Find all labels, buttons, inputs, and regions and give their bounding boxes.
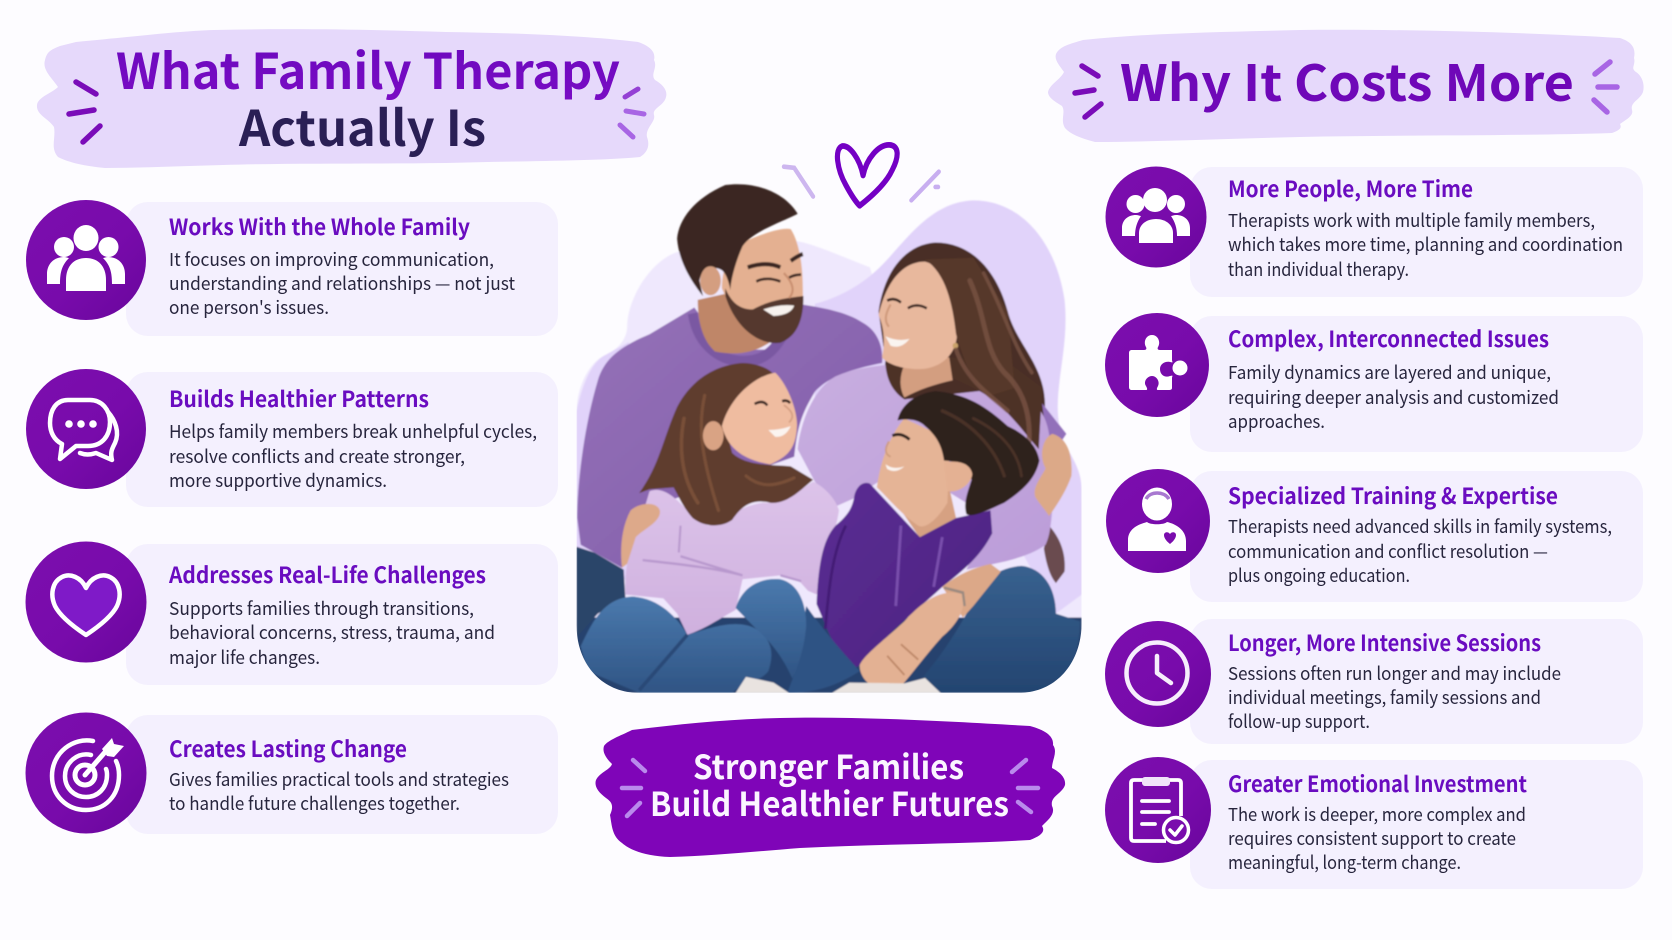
item text: more supportive dynamics. — [169, 467, 387, 493]
panel: right item 5 — [1105, 757, 1643, 889]
icon: target with arrow — [52, 738, 124, 810]
panel: left item 1 — [26, 200, 558, 336]
panel: right item 4 — [1105, 619, 1643, 744]
item text: requiring deeper analysis and customized — [1228, 384, 1559, 410]
item text: which takes more time, planning and coordination — [1228, 231, 1623, 257]
accent stroke left — [784, 167, 813, 197]
item title: Greater Emotional Investment — [1228, 767, 1527, 799]
item text — [169, 766, 509, 816]
item text: It focuses on improving communication, — [169, 246, 494, 272]
item text: follow-up support. — [1228, 708, 1370, 734]
item text — [1228, 513, 1612, 588]
item text: communication and conflict resolution — — [1228, 538, 1548, 564]
banner line one: Stronger Families — [693, 741, 964, 789]
right spark marks — [1594, 62, 1617, 112]
icon: heart outline — [837, 145, 897, 206]
card — [1190, 471, 1643, 602]
woman face — [879, 258, 1015, 396]
girl sweater — [625, 482, 839, 635]
item title: Addresses Real-Life Challenges — [168, 558, 486, 590]
shoes — [736, 677, 941, 693]
woman neck — [901, 357, 953, 397]
icon circle — [26, 542, 146, 662]
icon circle — [1106, 469, 1210, 573]
left spark marks — [69, 82, 100, 142]
item text: requires consistent support to create — [1228, 825, 1516, 851]
boy ear — [944, 462, 972, 491]
item title: Longer, More Intensive Sessions — [1228, 626, 1541, 658]
jeans — [581, 566, 1080, 693]
item text: Gives families practical tools and strategies — [169, 766, 509, 792]
card — [126, 372, 558, 507]
item title: Works With the Whole Family — [169, 210, 470, 242]
item text: behavioral concerns, stress, trauma, and — [169, 619, 495, 645]
icon circle — [1105, 757, 1211, 863]
banner line two: Build Healthier Futures — [650, 778, 1009, 826]
man ear — [700, 266, 721, 295]
item text: Therapists work with multiple family members, — [1228, 207, 1595, 233]
man face — [722, 229, 803, 343]
icon circle — [26, 369, 146, 489]
item title: Builds Healthier Patterns — [169, 382, 429, 414]
item text: Family dynamics are layered and unique, — [1228, 359, 1551, 385]
icon: family — [47, 225, 125, 291]
item text: one person's issues. — [169, 294, 329, 320]
left spark marks — [1075, 66, 1101, 117]
icon circle — [26, 200, 146, 320]
banner: Stronger Families Build Healthier Futures — [595, 718, 1065, 857]
card — [1190, 316, 1643, 452]
family photo illustration — [577, 184, 1082, 693]
brush stroke background — [37, 29, 666, 168]
card — [126, 544, 558, 685]
man sleeve far side — [1041, 402, 1067, 440]
card — [1190, 760, 1643, 889]
item title: Creates Lasting Change — [169, 732, 407, 764]
item text: The work is deeper, more complex and — [1228, 801, 1526, 827]
item text: resolve conflicts and create stronger, — [169, 443, 465, 469]
heading: Why It Costs More — [1048, 30, 1644, 142]
item text — [1228, 207, 1623, 282]
woman forearm — [942, 564, 1001, 618]
icon circle — [1105, 621, 1211, 727]
icon: clock — [1126, 642, 1188, 704]
icon: family — [1122, 188, 1190, 243]
brush stroke background — [1048, 30, 1644, 142]
panel: right item 1 — [1106, 166, 1643, 297]
item title: Complex, Interconnected Issues — [1228, 322, 1549, 354]
background blobs — [576, 200, 1082, 619]
spark marks — [622, 760, 1038, 816]
woman hair highlights — [956, 273, 1032, 449]
item text: major life changes. — [169, 644, 320, 670]
item text — [169, 595, 495, 670]
title text: Why It Costs More — [1120, 44, 1574, 116]
item text — [1228, 359, 1559, 434]
icon: speech bubbles — [50, 400, 117, 460]
girl hair highlights — [681, 396, 794, 510]
icon: clipboard with check — [1131, 777, 1188, 842]
item title: Specialized Training & Expertise — [1228, 479, 1558, 511]
item text — [169, 418, 537, 493]
man neck — [698, 292, 775, 353]
woman sweater — [798, 365, 1052, 570]
boy face — [877, 419, 949, 526]
panel: left item 4 — [26, 712, 558, 834]
icon: puzzle piece — [1129, 335, 1172, 390]
item text: than individual therapy. — [1228, 256, 1409, 282]
item text — [1228, 660, 1561, 734]
girl face — [703, 373, 797, 464]
icon circle — [1106, 166, 1206, 268]
item text: to handle future challenges together. — [169, 790, 460, 816]
clasped hands — [860, 588, 965, 688]
card — [1190, 619, 1643, 744]
boy neck — [904, 490, 957, 538]
item text: plus ongoing education. — [1228, 562, 1410, 588]
icon: therapist — [1128, 488, 1186, 551]
item text: understanding and relationships — not just — [169, 270, 515, 296]
man sweater — [577, 304, 882, 568]
card — [1190, 167, 1643, 297]
item text: Helps family members break unhelpful cycles, — [169, 418, 537, 444]
icon: heart — [52, 575, 120, 635]
boy hair — [898, 391, 1039, 515]
woman hair — [879, 242, 1065, 583]
item text: approaches. — [1228, 408, 1325, 434]
title line two: Actually Is — [238, 90, 486, 161]
icon circle — [1105, 313, 1209, 417]
icon circle — [26, 712, 146, 834]
man hair — [677, 184, 798, 296]
icon: puzzle knob — [1172, 360, 1188, 376]
woman hair lower — [885, 357, 1042, 449]
heart doodle — [784, 145, 939, 206]
item text — [169, 246, 515, 320]
right spark marks — [620, 89, 644, 137]
jeans base — [577, 618, 1082, 693]
item text — [1228, 801, 1526, 875]
heading: What Family Therapy Actually Is — [37, 29, 666, 168]
item text: Therapists need advanced skills in family systems, — [1228, 513, 1612, 539]
card — [126, 715, 558, 834]
brush stroke background — [595, 718, 1065, 857]
item text: Supports families through transitions, — [169, 595, 474, 621]
panel: right item 3 — [1106, 469, 1643, 602]
panel: left item 3 — [26, 542, 558, 685]
accent stroke right — [911, 172, 939, 200]
item text: Sessions often run longer and may include — [1228, 660, 1561, 686]
item text: meaningful, long-term change. — [1228, 849, 1461, 875]
panel: right item 2 — [1105, 313, 1643, 452]
panel: left item 2 — [26, 369, 558, 507]
card — [126, 202, 558, 336]
man hand on girl — [621, 504, 660, 568]
boy hair highlights — [942, 411, 1021, 476]
woman hand — [1035, 434, 1072, 516]
man jeans — [576, 546, 626, 619]
title line one: What Family Therapy — [116, 33, 620, 104]
item text: individual meetings, family sessions and — [1228, 684, 1541, 710]
girl hair — [639, 363, 813, 525]
boy hoodie — [817, 483, 992, 667]
item title: More People, More Time — [1228, 172, 1473, 204]
